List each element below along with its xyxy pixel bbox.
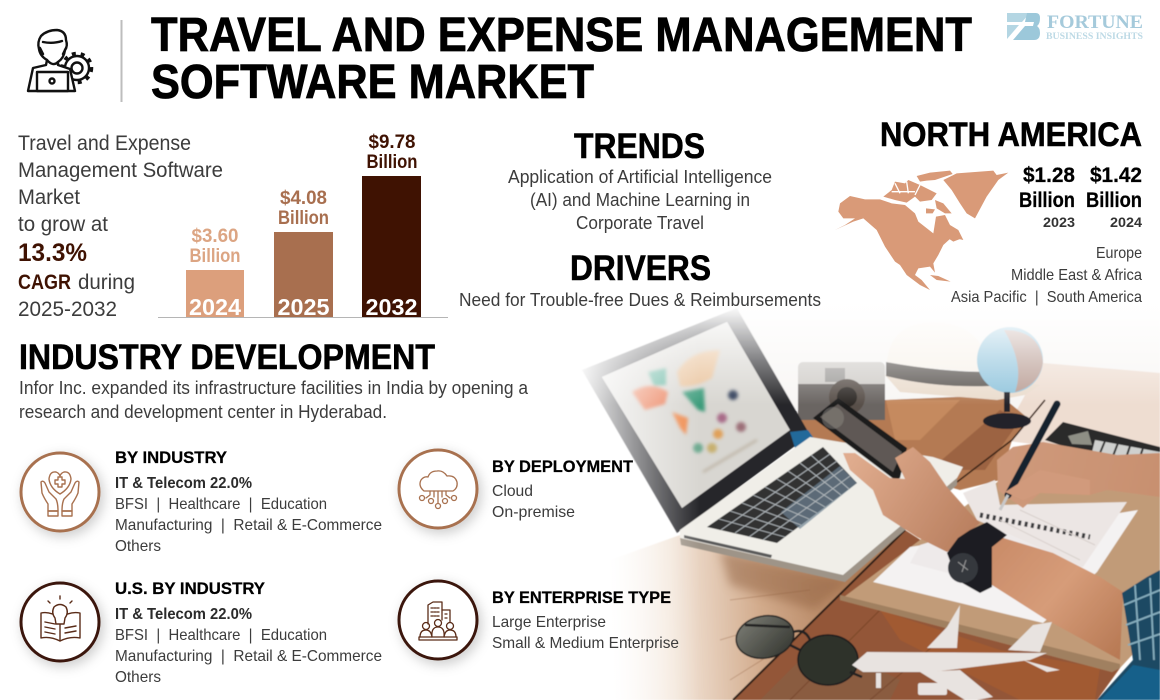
panel: by deployment: Cloud <box>492 483 533 500</box>
pen <box>1000 404 1057 510</box>
panel: by enterprise type <box>399 581 679 659</box>
icon: office buildings and people <box>399 581 477 659</box>
panel: industry development <box>19 338 529 422</box>
lower sheet of paper <box>873 510 1138 623</box>
panel: trends: Application of Artificial Intelligence <box>508 167 772 187</box>
panel: by industry: BY INDUSTRY <box>115 448 228 467</box>
panel: north america: NORTH AMERICA <box>880 116 1142 154</box>
bar chart <box>158 132 448 320</box>
clipboard <box>840 480 1160 672</box>
calculator <box>1045 422 1160 470</box>
panel: u.s. by industry: IT & Telecom 22.0% <box>115 606 252 623</box>
panel: north america: 2023 <box>1043 214 1075 230</box>
wood beyond seam: left pale section <box>610 530 905 700</box>
bar chart: $4.08 <box>280 188 327 209</box>
title: TRAVEL AND EXPENSE MANAGEMENT <box>151 9 972 62</box>
thumb over pen <box>1005 470 1090 500</box>
panel: by industry: Others <box>115 538 161 555</box>
panel: by deployment: BY DEPLOYMENT <box>492 457 634 476</box>
panel: trends: (AI) and Machine Learning in <box>530 190 750 210</box>
phone <box>813 398 907 480</box>
panel: by enterprise type: Large Enterprise <box>492 614 606 631</box>
title <box>151 9 972 109</box>
panel: trends <box>508 127 772 233</box>
notebook <box>910 480 1127 573</box>
panel: u.s. by industry: BFSI | Healthcare | Education <box>115 627 327 644</box>
text block: CAGR summary: CAGR <box>18 271 71 294</box>
bar chart: Billion <box>278 208 329 229</box>
bar chart: Billion <box>366 152 418 173</box>
bar chart: $3.60 <box>192 226 238 247</box>
bar chart: $9.78 <box>368 132 416 153</box>
panel: by industry: Manufacturing | Retail & E-Commerce <box>115 517 382 534</box>
panel: north america: Europe <box>1096 245 1142 262</box>
bar chart: 2025 <box>278 294 330 320</box>
panel: industry development: INDUSTRY DEVELOPMENT <box>19 338 435 377</box>
title: SOFTWARE MARKET <box>151 56 594 109</box>
panel: drivers <box>459 249 821 310</box>
text block: CAGR summary: 2025-2032 <box>18 298 117 321</box>
icon: hands holding heart <box>21 453 99 531</box>
watch <box>947 522 1007 593</box>
far background <box>740 300 1160 410</box>
logo: Fortune Business Insights: BUSINESS INSIGHTS <box>1046 32 1143 42</box>
divider <box>120 20 122 102</box>
panel: trends: Corporate Travel <box>576 213 704 233</box>
writing hand <box>997 442 1160 508</box>
panel: u.s. by industry <box>21 579 382 686</box>
sleeve <box>1097 570 1160 700</box>
globe <box>977 327 1043 429</box>
holding hand <box>843 447 980 552</box>
panel: north america <box>835 116 1142 306</box>
logo: Fortune Business Insights <box>1007 13 1143 42</box>
bar chart: Billion <box>190 246 240 267</box>
panel: by industry <box>21 448 382 555</box>
photo: laptop, phone and notebook on a desk <box>560 298 1160 700</box>
hat <box>885 322 1040 400</box>
text block: CAGR summary <box>18 132 223 321</box>
icon: open book with lightbulb <box>21 583 99 661</box>
panel: trends: TRENDS <box>574 127 705 166</box>
panel: drivers: Need for Trouble-free Dues & Reimbursements <box>459 290 821 310</box>
panel: industry development: Infor Inc. expanded its infrastructure facilities in India by opening a <box>19 378 529 398</box>
laptop screen <box>582 308 815 533</box>
forearm <box>992 537 1123 660</box>
icon: person with laptop and gear <box>28 30 92 91</box>
panel: by enterprise type: Small & Medium Enterprise <box>492 635 679 652</box>
sunglasses <box>733 611 862 685</box>
panel: north america: 2024 <box>1110 214 1142 230</box>
panel: north america: $1.28 <box>1023 164 1075 187</box>
bar chart: 2024 <box>189 294 241 320</box>
logo: Fortune Business Insights: FORTUNE <box>1047 13 1143 33</box>
panel: by deployment <box>399 450 634 528</box>
beige table <box>1000 363 1160 460</box>
panel: north america: $1.42 <box>1090 164 1142 187</box>
laptop base <box>680 437 963 582</box>
panel: by industry: BFSI | Healthcare | Education <box>115 496 327 513</box>
back wood <box>800 395 1030 490</box>
panel: drivers: DRIVERS <box>570 249 711 288</box>
text block: CAGR summary: to grow at <box>18 213 108 236</box>
panel: u.s. by industry: U.S. BY INDUSTRY <box>115 579 266 598</box>
plane <box>852 605 1060 700</box>
map: north america <box>835 171 1008 290</box>
text block: CAGR summary: Travel and Expense <box>18 132 191 155</box>
panel: industry development: research and development center in Hyderabad. <box>19 402 387 422</box>
panel: north america: Asia Pacific | South America <box>951 289 1142 306</box>
bar chart: 2032 <box>366 294 418 320</box>
panel: north america: Billion <box>1019 189 1075 212</box>
panel: by enterprise type: BY ENTERPRISE TYPE <box>492 588 671 607</box>
wood below clipboard <box>733 530 1120 700</box>
panel: north america: Middle East & Africa <box>1011 267 1142 284</box>
text block: CAGR summary: during <box>78 271 135 294</box>
panel: by industry: IT & Telecom 22.0% <box>115 475 252 492</box>
panel: north america: Billion <box>1086 189 1142 212</box>
icon: cloud network <box>399 450 477 528</box>
text block: CAGR summary: 13.3% <box>18 239 87 267</box>
text block: CAGR summary: Management Software <box>18 159 223 182</box>
text block: CAGR summary: Market <box>18 186 80 209</box>
panel: by deployment: On-premise <box>492 504 575 521</box>
camera <box>798 362 885 420</box>
seam <box>733 530 905 700</box>
panel: u.s. by industry: Others <box>115 669 161 686</box>
panel: u.s. by industry: Manufacturing | Retail & E-Commerce <box>115 648 382 665</box>
